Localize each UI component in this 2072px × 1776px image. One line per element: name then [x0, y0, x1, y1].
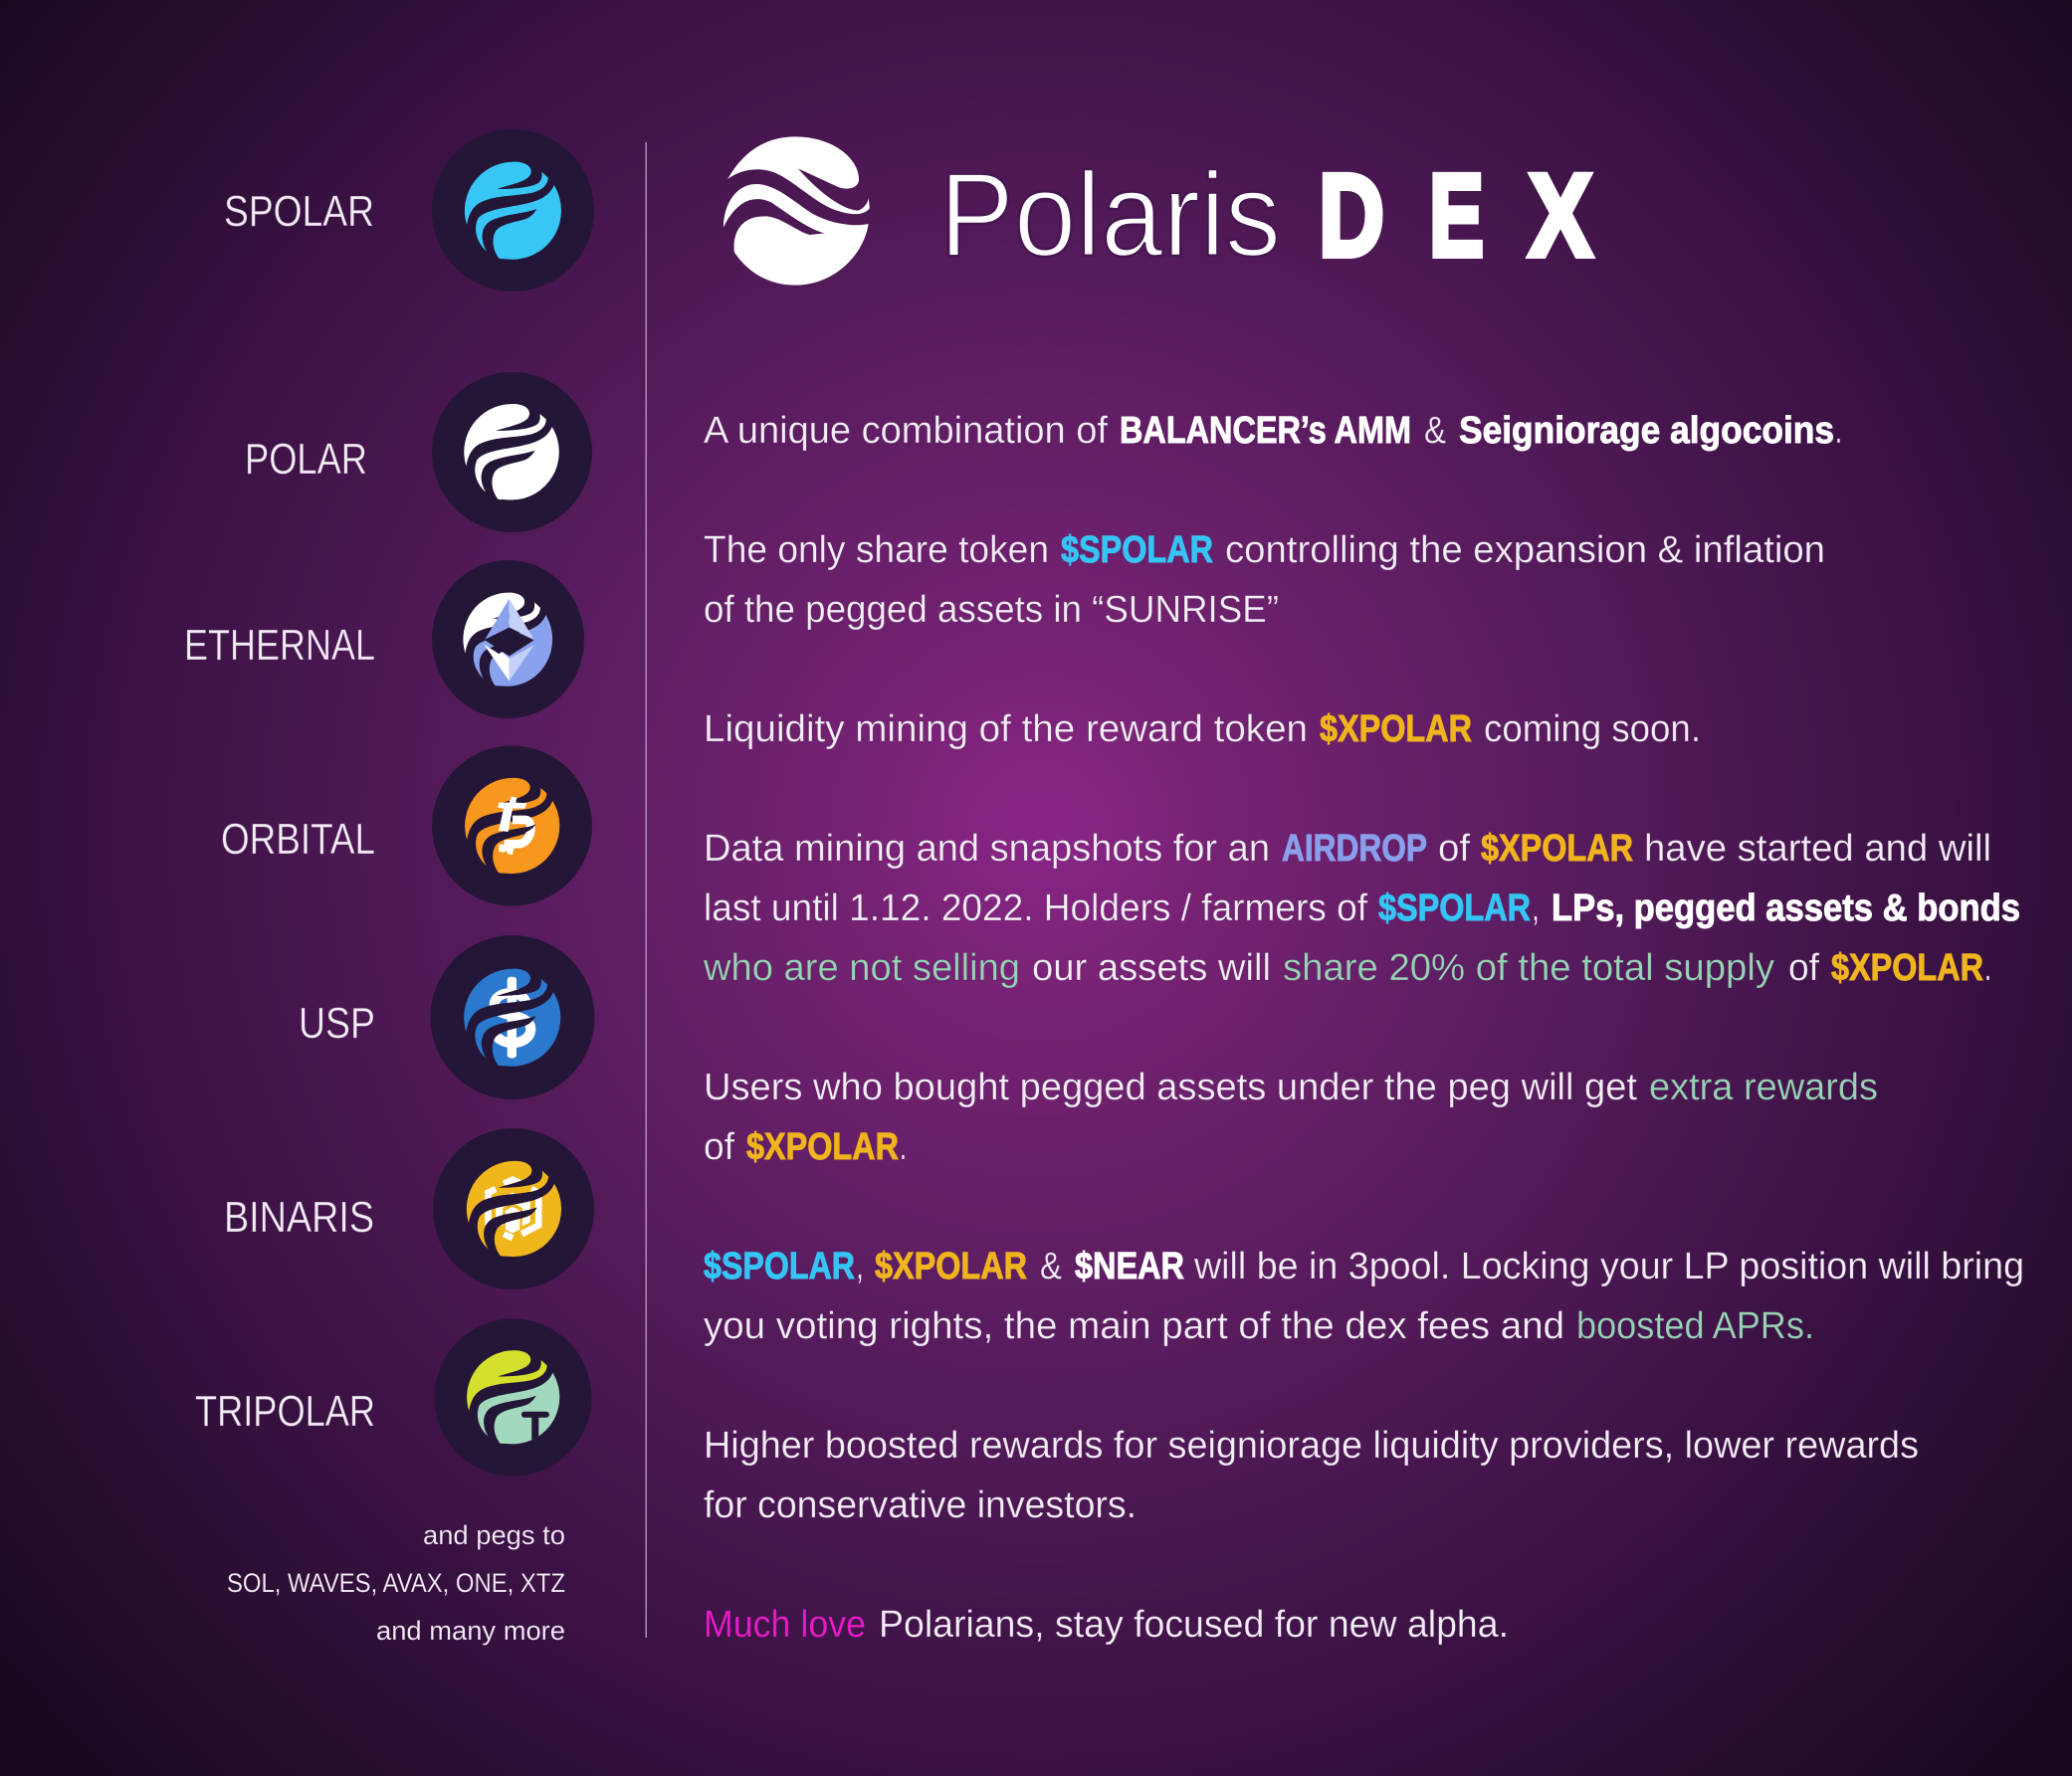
icon: TRIPOLAR	[434, 1319, 591, 1477]
icon: ETHERNAL	[432, 560, 584, 718]
icon: ORBITAL	[432, 746, 592, 905]
token list: left labels and icons	[184, 129, 595, 1646]
text block: airdrop: LPs, pegged assets & bonds	[1552, 888, 2020, 929]
label: ORBITAL: ORBITAL	[221, 815, 375, 864]
icon: SPOLAR	[432, 129, 594, 292]
text block: sign-off: Much love	[704, 1604, 866, 1646]
vertical divider	[645, 142, 647, 1638]
label: USP: USP	[299, 999, 375, 1048]
text block: 3pool	[704, 1246, 2024, 1347]
label: POLAR: POLAR	[245, 435, 367, 484]
text block: airdrop: $XPOLAR	[1481, 828, 1633, 870]
text block: airdrop: $SPOLAR	[1378, 888, 1531, 929]
icon: BINARIS	[433, 1128, 594, 1289]
label: SPOLAR: SPOLAR	[224, 187, 374, 236]
text block: 3pool: $SPOLAR	[704, 1246, 855, 1287]
note: other pegs: SOL, WAVES, AVAX, ONE, XTZ	[227, 1568, 565, 1598]
text block: boosted rewards: Higher boosted rewards for seigniorage liquidity providers, lower rewards	[704, 1425, 1919, 1467]
text block: extra rewards: of	[704, 1126, 734, 1168]
text block: intro line: &	[1424, 410, 1446, 452]
label: ETHERNAL: ETHERNAL	[184, 621, 375, 670]
text block: extra rewards: extra rewards	[1649, 1067, 1878, 1108]
text block: airdrop: have started and will	[1644, 828, 1991, 870]
title: Polaris DEX: D	[1319, 150, 1384, 282]
text block: liquidity mining: $XPOLAR	[1320, 708, 1472, 750]
text block: intro line: A unique combination of	[704, 410, 1108, 452]
text block: airdrop: $XPOLAR	[1831, 947, 1983, 989]
note: other pegs	[227, 1520, 565, 1646]
text block: 3pool: you voting rights, the main part of the dex fees and	[704, 1305, 1564, 1347]
text block: airdrop: our assets will	[1032, 947, 1271, 989]
note: other pegs: and pegs to	[423, 1520, 565, 1550]
label: TRIPOLAR: TRIPOLAR	[195, 1387, 375, 1436]
text block: sign-off: Polarians, stay focused for new alpha.	[879, 1604, 1509, 1646]
text block: extra rewards: $XPOLAR	[746, 1126, 899, 1168]
title: Polaris DEX	[939, 148, 1592, 282]
text block: intro line	[704, 410, 1842, 452]
text block: boosted rewards: for conservative investors.	[704, 1484, 1137, 1526]
text block: airdrop: ,	[1532, 888, 1540, 929]
text block: airdrop: .	[1984, 947, 1991, 989]
text block: intro line: .	[1835, 410, 1842, 452]
header logo: Polaris swirl	[724, 136, 870, 286]
text block: airdrop: of	[1438, 828, 1470, 870]
text block: extra rewards	[704, 1067, 1878, 1168]
text block: 3pool: ,	[856, 1246, 864, 1287]
icon: USP	[430, 935, 595, 1099]
text block: share token: of the pegged assets in “SUNRISE”	[704, 589, 1279, 631]
text block: share token	[704, 529, 1825, 631]
text block: airdrop	[703, 828, 2020, 989]
text block: 3pool: will be in 3pool. Locking your LP position will bring	[1193, 1246, 2024, 1287]
text block: share token: controlling the expansion & inflation	[1225, 529, 1825, 571]
text block: intro line: Seigniorage algocoins	[1459, 410, 1834, 452]
title: Polaris DEX: Polaris	[939, 148, 1281, 282]
note: other pegs: and many more	[376, 1616, 565, 1646]
text block: boosted rewards	[704, 1425, 1919, 1526]
text block: intro line: BALANCER’s AMM	[1120, 410, 1411, 452]
text block: 3pool: $XPOLAR	[875, 1246, 1027, 1287]
text block: liquidity mining: Liquidity mining of the reward token	[704, 708, 1308, 750]
text block: liquidity mining: coming soon.	[1484, 708, 1701, 750]
text block: extra rewards: Users who bought pegged assets under the peg will get	[704, 1067, 1637, 1108]
text block: airdrop: of	[1788, 947, 1819, 989]
text block: extra rewards: .	[900, 1126, 907, 1168]
text block: airdrop: share 20% of the total supply	[1283, 947, 1774, 989]
text block: airdrop: who are not selling	[703, 947, 1020, 989]
icon: POLAR	[432, 372, 592, 532]
text block: liquidity mining	[704, 708, 1701, 750]
title: Polaris DEX: X	[1529, 150, 1592, 282]
text block: airdrop: AIRDROP	[1282, 828, 1427, 870]
text block: airdrop: Data mining and snapshots for an	[704, 828, 1270, 870]
label: BINARIS: BINARIS	[224, 1193, 374, 1242]
text block: share token: The only share token	[704, 529, 1049, 571]
text block: 3pool: boosted APRs.	[1576, 1305, 1814, 1347]
text block: 3pool: $NEAR	[1075, 1246, 1184, 1287]
text block: airdrop: last until 1.12. 2022. Holders / farmers of	[704, 888, 1367, 929]
text block: share token: $SPOLAR	[1061, 529, 1213, 571]
text block: 3pool: &	[1040, 1246, 1062, 1287]
title: Polaris DEX: E	[1429, 150, 1484, 282]
